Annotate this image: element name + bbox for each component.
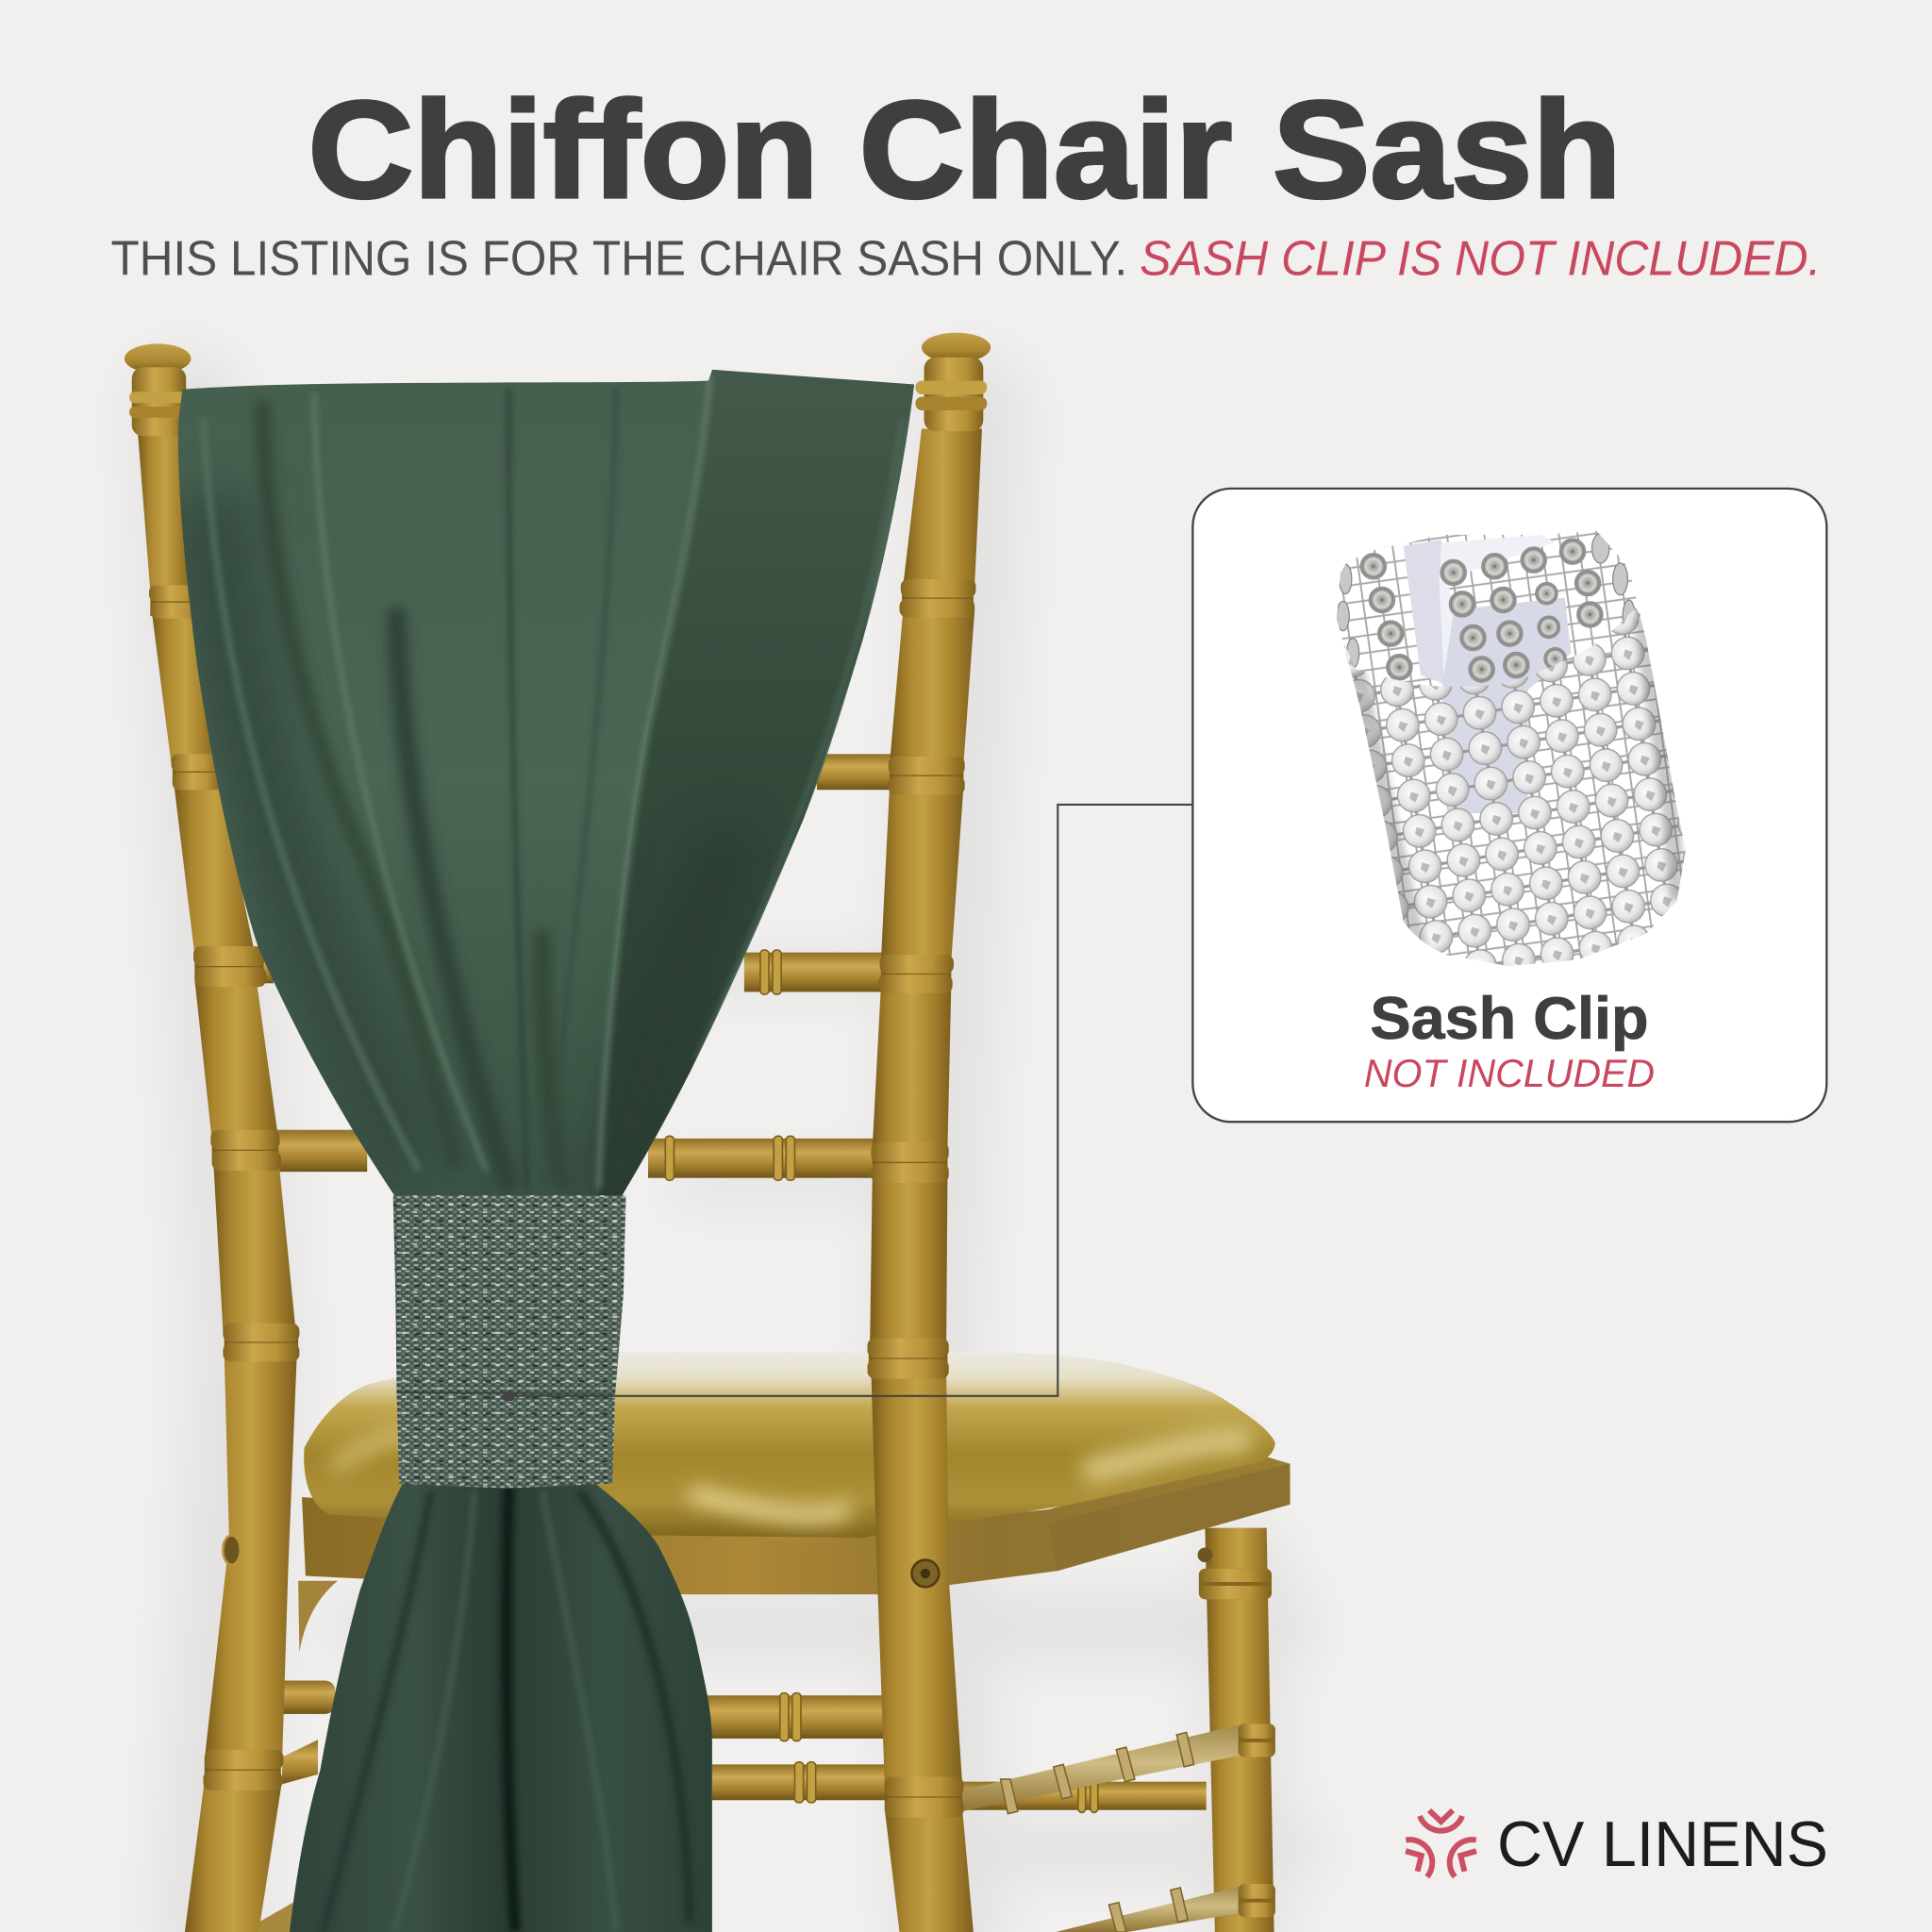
sash right flap [599, 370, 914, 1195]
left post rings [149, 585, 299, 1790]
sash left lobe shade [209, 492, 419, 1171]
title: Chiffon Chair Sash [308, 73, 1622, 226]
subtitle: clip warning: SASH CLIP IS NOT INCLUDED. [1140, 231, 1821, 286]
upper sash [173, 363, 924, 1201]
sash folds [262, 407, 560, 1183]
seat frame corner [1049, 1464, 1291, 1571]
right post [868, 333, 1212, 1932]
chair photo with sash [125, 333, 1293, 1932]
seat cushion [304, 1352, 1275, 1538]
panel: sash clip callout [1192, 489, 1826, 1122]
left bolt [223, 1535, 241, 1565]
sash clip photo [1331, 527, 1694, 974]
back rhinestone mounts [1360, 539, 1603, 682]
logo icon [1401, 1810, 1481, 1879]
brand logo [1401, 1808, 1828, 1880]
white backing [1439, 535, 1555, 684]
rear leg [1199, 1528, 1274, 1932]
left post [125, 343, 299, 1932]
cushion highlight [333, 1429, 1251, 1515]
sash lower flap shade [616, 850, 727, 1183]
lower sash [283, 1478, 715, 1932]
subtitle: listing note: THIS LISTING IS FOR THE CHAIR SASH ONLY. [111, 231, 1127, 286]
clip front rhinestones [1343, 608, 1686, 966]
left and right edge gems [1337, 534, 1635, 668]
logo wordmark: CV LINENS [1497, 1808, 1828, 1880]
clip name: Sash Clip [1370, 986, 1649, 1052]
chair rungs [251, 754, 1207, 1932]
left post finial [125, 343, 191, 374]
seat frame [302, 1454, 1291, 1594]
rhinestone band on sash [393, 1195, 626, 1489]
not included label: NOT INCLUDED [1364, 1051, 1655, 1095]
side stretchers [962, 1724, 1275, 1932]
seat bracket [298, 1581, 338, 1653]
rear bolt [1198, 1547, 1212, 1562]
callout connector line [503, 805, 1192, 1401]
clip inner back [1331, 527, 1694, 971]
soft chair shadow [185, 407, 1293, 1923]
connector dot [503, 1391, 514, 1401]
right post rings [868, 579, 975, 1818]
front bolt [912, 1560, 939, 1587]
subtitle [111, 231, 1821, 286]
right post finial [922, 333, 991, 362]
